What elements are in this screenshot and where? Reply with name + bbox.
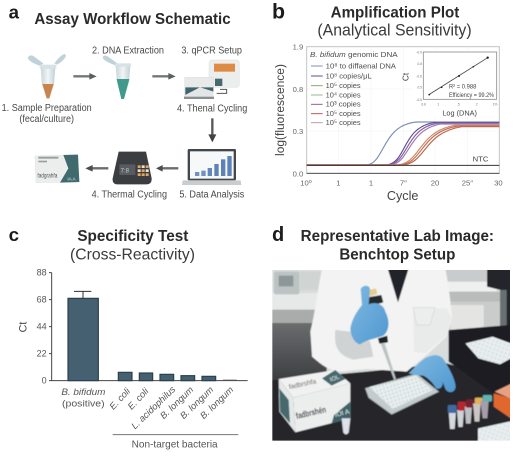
bar chart: Ct by organism bbox=[18, 268, 248, 451]
arrow: down to data analysis bbox=[208, 118, 216, 142]
y axis tick labels bbox=[37, 268, 47, 386]
error bar bbox=[74, 291, 91, 298]
icon: extraction tube bbox=[103, 56, 131, 99]
y axis tick labels bbox=[293, 43, 303, 178]
y axis title: Ct bbox=[18, 322, 30, 332]
step label: sample preparation: 1. Sample Preparation bbox=[2, 103, 92, 114]
category labels: L. acidophilus bbox=[129, 384, 178, 431]
small sample tube bbox=[342, 418, 350, 434]
lab coat bbox=[310, 268, 452, 372]
icon: thermal cycler bbox=[113, 152, 152, 184]
inset standard curve: 2 bbox=[476, 102, 478, 106]
icon: sample tube bbox=[28, 54, 66, 98]
category labels bbox=[61, 384, 236, 431]
category labels: B. longum bbox=[158, 384, 196, 421]
dark tip box bbox=[449, 325, 513, 393]
dark shirt bbox=[388, 268, 409, 302]
amplification curves bbox=[307, 122, 499, 165]
icon: laptop with bar chart bbox=[182, 149, 241, 185]
x axis tick labels: 25″ bbox=[462, 179, 473, 188]
step label: thermal cycling (upper): 4. Thenal Cycling bbox=[177, 103, 247, 114]
arrow: thermal cycling to kit bbox=[85, 165, 108, 172]
y axis tick labels: 0.3 bbox=[293, 127, 303, 136]
gloved hand holding pipette bbox=[350, 286, 388, 344]
bench top bbox=[270, 363, 513, 443]
panel d: representative lab image bbox=[270, 224, 513, 443]
kit box: IOL bbox=[329, 374, 341, 384]
panel b: amplification plot bbox=[272, 0, 503, 203]
x axis tick labels bbox=[300, 179, 503, 188]
category labels: E. coli bbox=[107, 386, 133, 412]
legend: 10⁴ copies bbox=[326, 90, 361, 99]
x axis tick labels: 20 bbox=[431, 179, 439, 188]
legend bbox=[310, 50, 399, 127]
NTC label: NTC bbox=[473, 155, 489, 164]
inset standard curve: 0.8 bbox=[421, 102, 426, 106]
NTC baseline bbox=[307, 164, 499, 167]
category labels: B. longum bbox=[178, 384, 216, 421]
category labels: B. longum bbox=[198, 384, 236, 421]
inset standard curve: Log (DNA) bbox=[442, 108, 477, 117]
panel letter d: d bbox=[272, 224, 284, 246]
legend: 10⁸ to diffaenal DNA bbox=[326, 61, 397, 70]
tip rack bbox=[465, 337, 511, 364]
x axis tick labels: 7″ bbox=[400, 179, 407, 188]
icon: assay kit box: IA A bbox=[67, 176, 77, 181]
icon: assay kit box: fadgrahfa bbox=[37, 173, 58, 179]
gloved hand on plate bbox=[409, 355, 456, 392]
inset standard curve: Ct bbox=[401, 72, 411, 81]
inset standard curve: .5 bbox=[457, 102, 460, 106]
y axis tick labels: 0.0 bbox=[293, 169, 303, 178]
icon: assay kit box bbox=[35, 155, 79, 183]
kit box: fadbrshén bbox=[295, 404, 327, 421]
legend: 10⁵ copies bbox=[326, 109, 361, 118]
inset standard curve: Efficiency = 99.2% bbox=[449, 93, 495, 99]
y axis tick labels: 0 bbox=[42, 376, 47, 386]
legend: 10⁵ copies bbox=[326, 118, 361, 127]
amplification line chart bbox=[293, 43, 503, 188]
step label: qPCR setup: 3. qPCR Setup bbox=[181, 45, 242, 56]
icon: qPCR setup instruments bbox=[184, 60, 239, 99]
legend: 10³ copies bbox=[326, 100, 361, 109]
legend: 10⁵ copies bbox=[326, 81, 361, 90]
non-target label: Non-target bacteria bbox=[132, 440, 218, 451]
y axis tick labels: 22 bbox=[37, 349, 47, 359]
inset standard curve: 0.8 bbox=[417, 62, 422, 66]
panel letter b: b bbox=[272, 0, 285, 23]
step label: DNA extraction: 2. DNA Extraction bbox=[92, 45, 164, 56]
y axis tick labels: 88 bbox=[37, 268, 47, 278]
category labels: E. coli bbox=[126, 386, 151, 412]
category labels: (positive) bbox=[62, 399, 105, 409]
y axis tick labels: 0.8 bbox=[293, 85, 303, 94]
inset standard curve: -0.6 bbox=[416, 74, 422, 78]
x axis title: Cycle bbox=[387, 189, 418, 203]
kit box: fadbrshfa bbox=[288, 378, 317, 391]
inset standard curve: -0.6 bbox=[416, 98, 422, 102]
coloured reagent tubes bbox=[448, 395, 492, 429]
legend: B. bifidum genomic DNA bbox=[310, 50, 399, 59]
x axis tick labels: 1 bbox=[369, 179, 373, 188]
white well plate bbox=[365, 374, 439, 414]
y axis title: log(fluorescence) bbox=[273, 64, 287, 156]
legend: 10⁸ copies/μL bbox=[326, 71, 372, 80]
x axis tick labels: 10⁰ bbox=[300, 179, 312, 188]
icon: thermal cycler: 7:8 bbox=[121, 168, 130, 174]
kit box bbox=[279, 370, 351, 432]
x axis tick labels: 30 bbox=[494, 179, 503, 188]
tip rack corner bbox=[477, 420, 510, 441]
y axis tick labels: 68 bbox=[37, 295, 47, 305]
subheading: analytical sensitivity: (Analytical Sensitivity) bbox=[317, 21, 472, 39]
step label: data analysis: 5. Data Analysis bbox=[179, 189, 244, 200]
kit box: IOI A bbox=[334, 408, 351, 419]
step label: fecal or culture: (fecal/culture) bbox=[19, 114, 74, 125]
non-target bracket bbox=[113, 433, 238, 436]
inset standard curve: 0.5 bbox=[417, 86, 422, 90]
heading: assay workflow schematic: Assay Workflow Schematic bbox=[34, 11, 231, 28]
axes bbox=[49, 273, 248, 381]
x axis tick labels: 1 bbox=[336, 179, 340, 188]
bars bbox=[68, 298, 216, 381]
y axis tick labels: 1.9 bbox=[293, 43, 303, 52]
category labels: B. bifidum bbox=[61, 387, 106, 397]
orange tip box bbox=[494, 393, 512, 419]
y axis tick labels: 44 bbox=[37, 322, 47, 332]
panel c: specificity test bbox=[9, 224, 248, 451]
arrow: step 1 to 2 bbox=[73, 73, 97, 80]
heading: representative lab image: Representative Lab Image: bbox=[301, 228, 494, 245]
background right bbox=[446, 270, 487, 282]
inset standard curve: -0.9 bbox=[416, 50, 422, 54]
heading: specificity test: Specificity Test bbox=[77, 228, 189, 245]
arrow: data analysis to thermal cycling bbox=[156, 165, 178, 172]
heading: amplification plot: Amplification Plot bbox=[331, 4, 460, 21]
panel letter c: c bbox=[9, 224, 19, 245]
inset standard curve: 1% bbox=[493, 102, 497, 106]
inset standard curve bbox=[401, 50, 497, 117]
inset standard curve: 1 bbox=[437, 102, 439, 106]
panel a: assay workflow schematic bbox=[2, 1, 247, 200]
panel letter a: a bbox=[9, 1, 20, 22]
x axis line bbox=[307, 172, 499, 175]
subheading: cross-reactivity: (Cross-Reactivity) bbox=[70, 246, 195, 263]
heading: benchtop setup: Benchtop Setup bbox=[339, 247, 455, 264]
inset standard curve: R² = 0.988 bbox=[449, 84, 477, 90]
background left bbox=[272, 270, 500, 375]
arrow: step 2 to 3 bbox=[152, 73, 176, 80]
step label: thermal cycling (lower): 4. Thermal Cycling bbox=[92, 189, 167, 200]
lab bench illustration bbox=[270, 268, 513, 443]
pipette bbox=[366, 288, 396, 380]
